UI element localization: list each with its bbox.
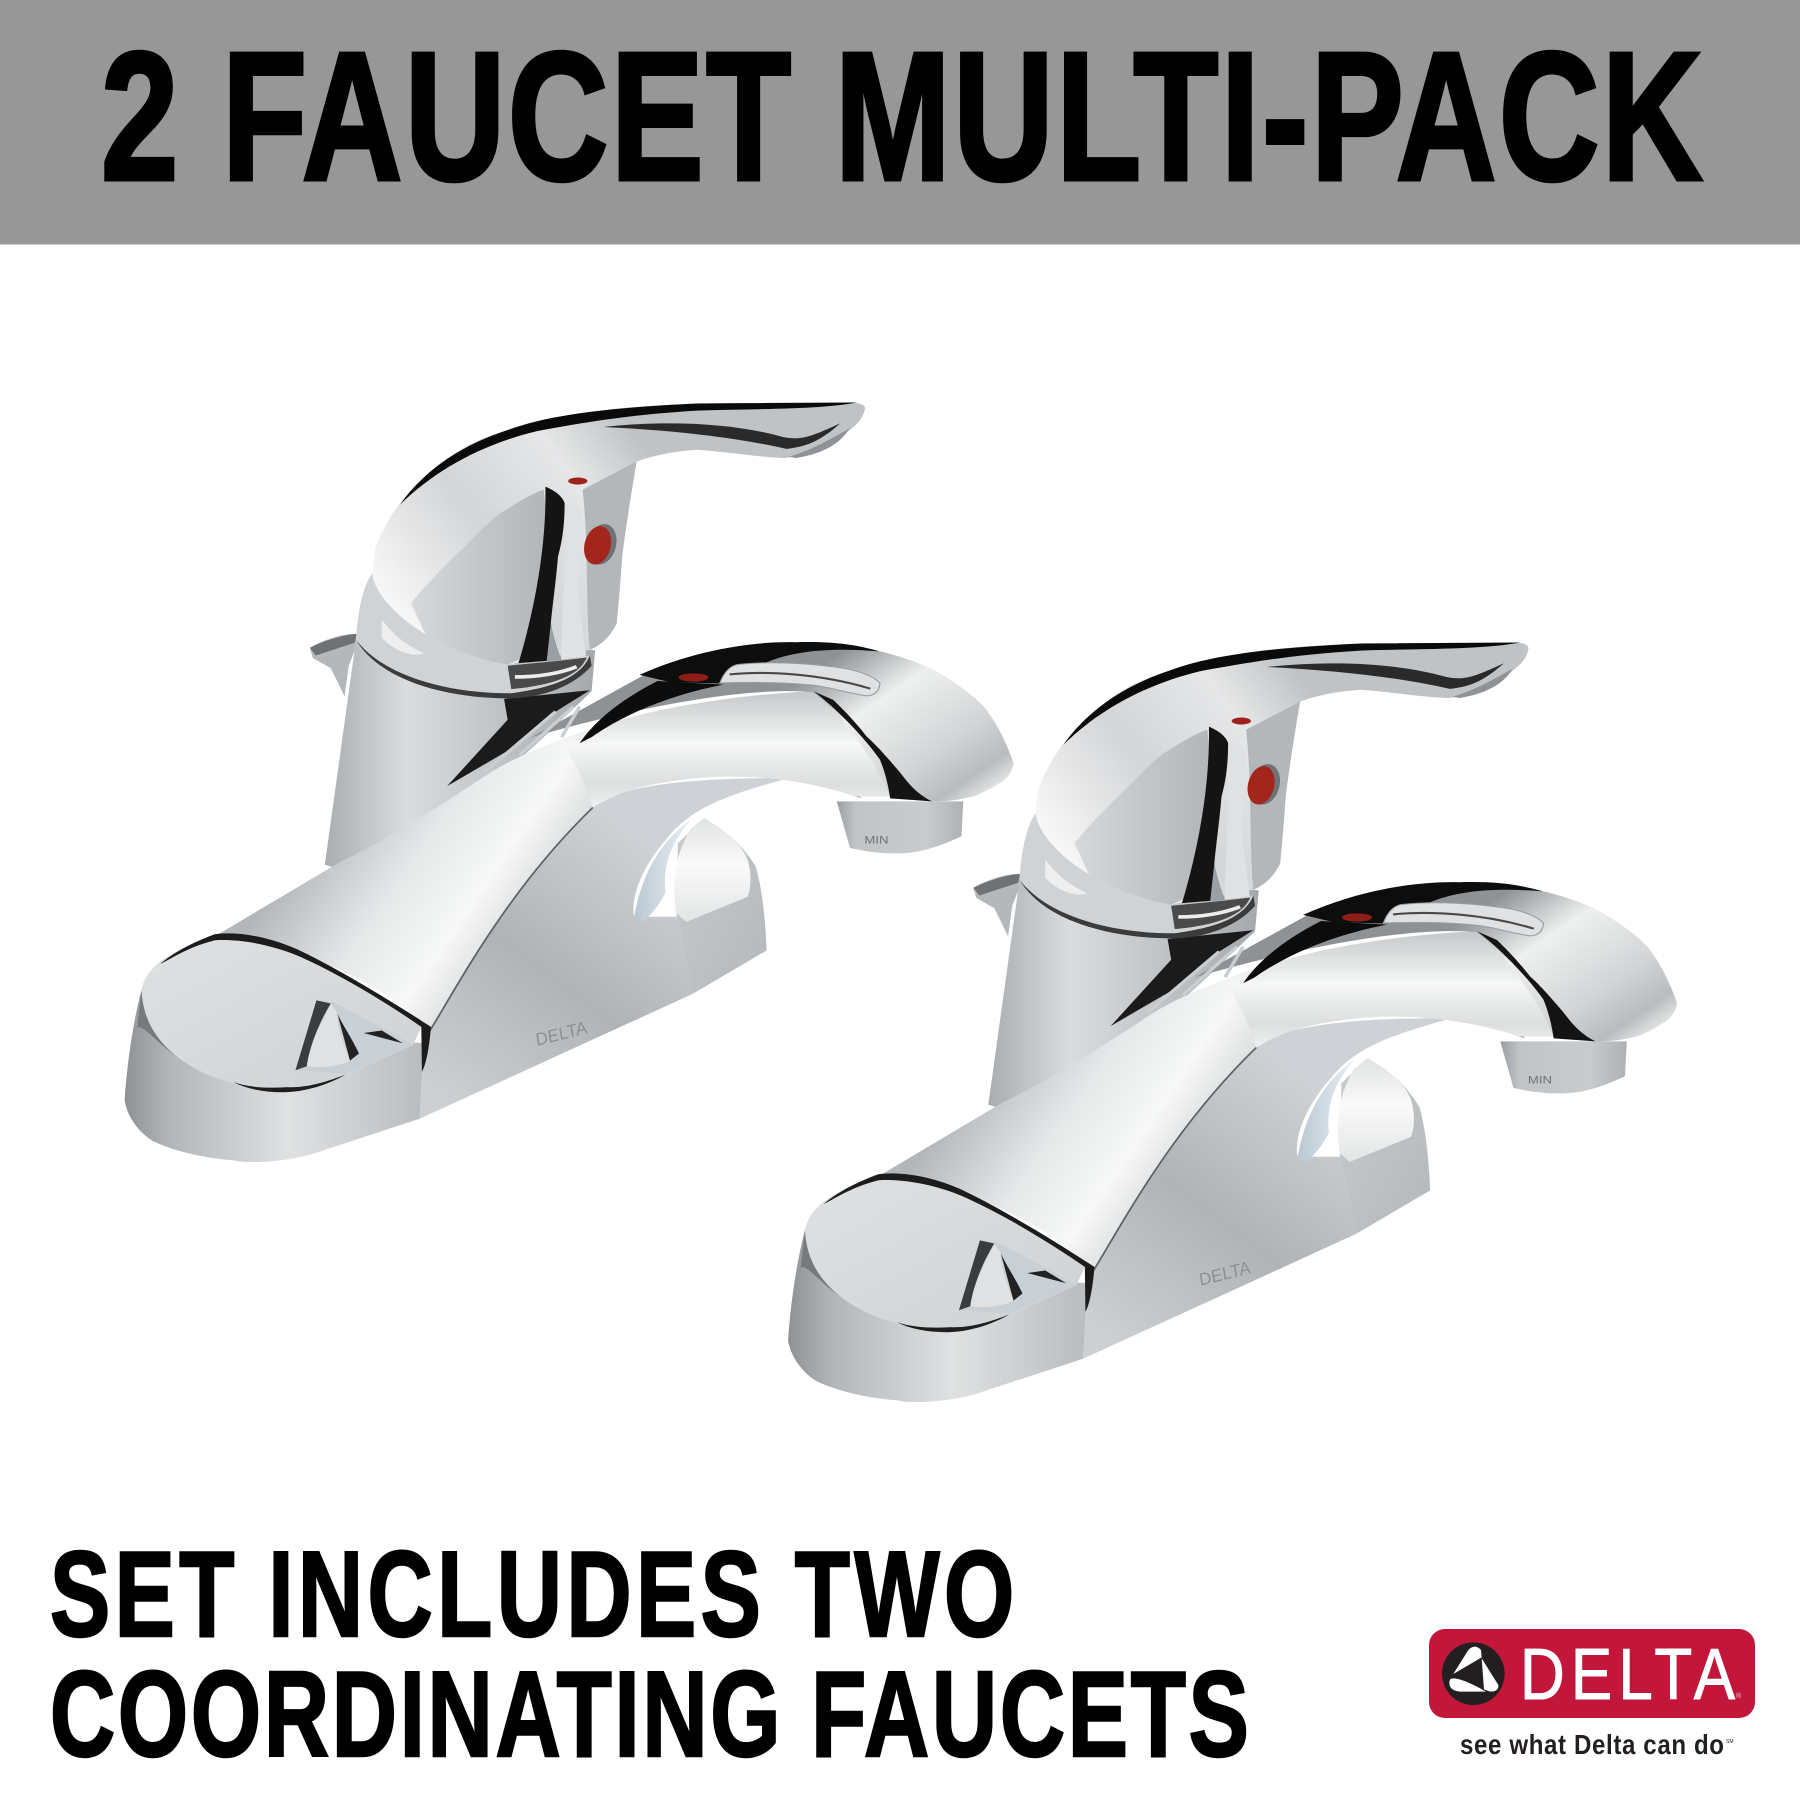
caption line two: COORDINATING FAUCETS (50, 1646, 1249, 1782)
back deck plate (674, 818, 767, 994)
logo tagline: see what Delta can do (1460, 1728, 1724, 1760)
embossed brand: DELTA (532, 1017, 590, 1050)
lever handle (372, 402, 865, 665)
delta logo (1429, 1629, 1755, 1760)
caption line one: SET INCLUDES TWO (50, 1526, 1014, 1662)
title: 2 FAUCET MULTI-PACK (101, 15, 1702, 219)
logo wordmark: DELTA (1520, 1635, 1735, 1715)
service mark: SM (1726, 1739, 1734, 1745)
header banner (0, 0, 1800, 244)
deck front rim (125, 990, 424, 1162)
red hot indicator (568, 477, 620, 567)
collar (356, 573, 592, 698)
lift rod knob (310, 634, 357, 696)
faucet one (125, 402, 1014, 1162)
inner arch highlight (634, 820, 691, 922)
logo badge (1429, 1629, 1755, 1718)
spout top (215, 699, 861, 1033)
logo emblem (1442, 1642, 1505, 1705)
lever right face (583, 462, 637, 650)
caption (50, 1526, 1249, 1782)
registered mark: ® (1736, 1692, 1742, 1700)
lever chrome strip (518, 487, 586, 663)
deck top dark edge (160, 933, 431, 1072)
spout head (532, 643, 1014, 801)
hub cylinder (325, 635, 595, 872)
body arc edge (429, 808, 593, 1033)
red spout indicator (679, 673, 708, 682)
rim shine (137, 990, 346, 1092)
aerator: MIN (864, 833, 889, 846)
spout upper band (562, 691, 891, 808)
front body (420, 778, 789, 1119)
handle cutout triangle (295, 1000, 413, 1074)
faucet two (788, 642, 1677, 1402)
deck top plate (141, 935, 421, 1088)
aerator (837, 801, 963, 853)
lever center face (411, 490, 547, 665)
chrome reflections (447, 642, 932, 801)
lever reflections (400, 402, 857, 505)
